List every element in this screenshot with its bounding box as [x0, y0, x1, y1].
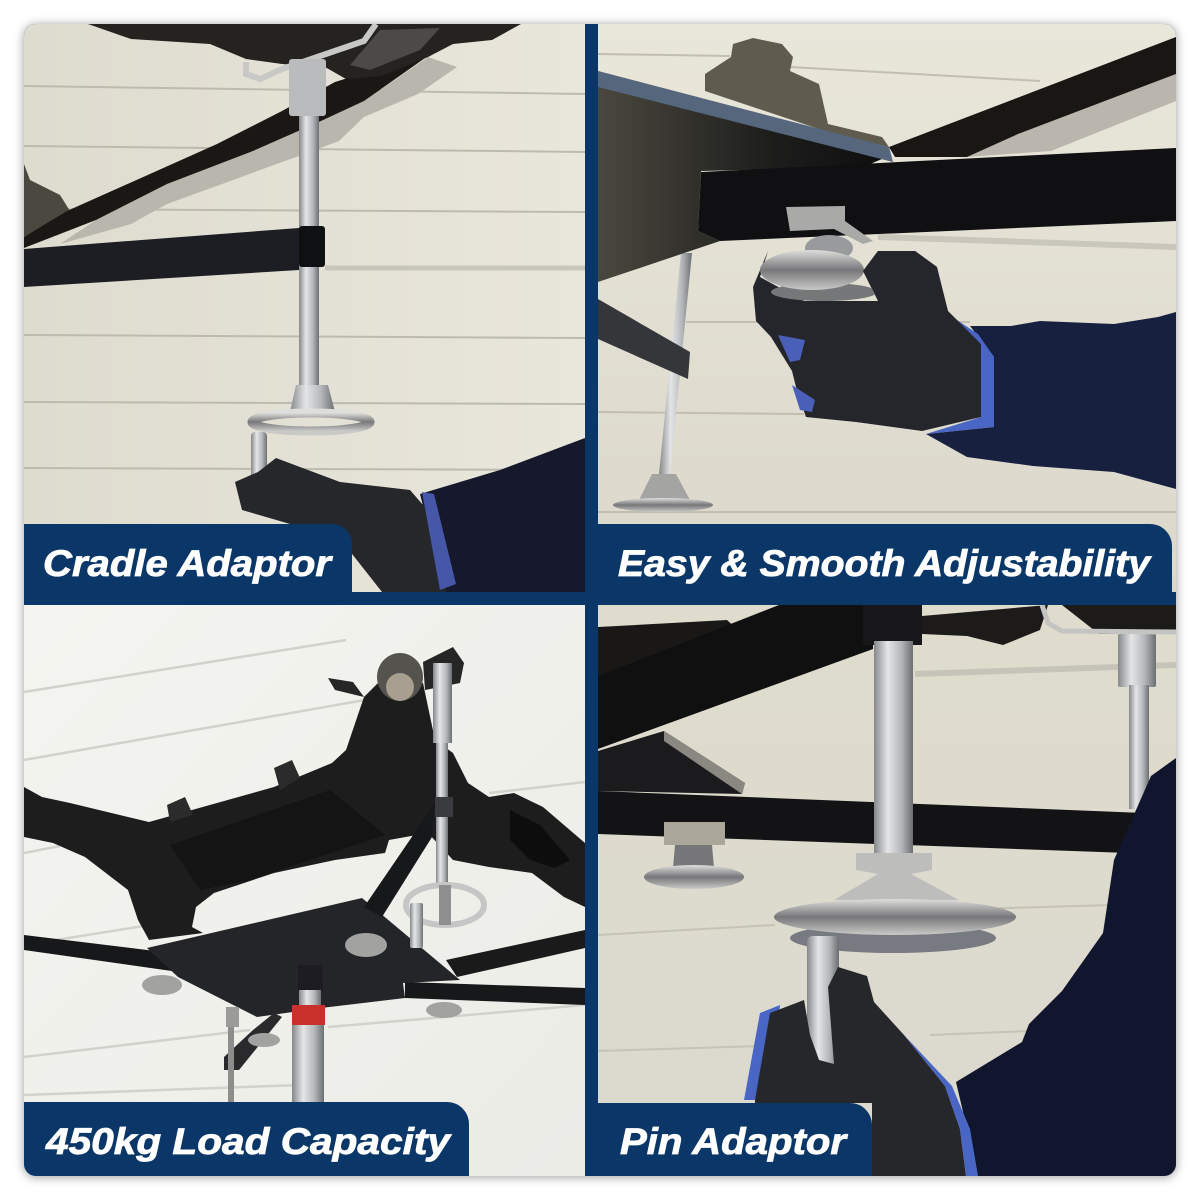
bushing [377, 653, 423, 701]
label: 450kg load capacity [24, 1102, 469, 1176]
arm sleeve [299, 226, 325, 267]
horizontal arm [24, 228, 299, 287]
wheel left [142, 975, 182, 995]
panel stamping [170, 790, 385, 890]
right rod [1129, 685, 1149, 809]
lower wheel [613, 498, 713, 512]
horizontal beam [598, 791, 1144, 853]
collar [289, 59, 326, 116]
wheel upright [406, 885, 484, 925]
label: 450kg load capacity: 450kg Load Capacity [45, 1121, 453, 1162]
glove cuff [926, 314, 994, 434]
collar [863, 605, 922, 645]
wheel plate [790, 923, 996, 953]
wheel hub [805, 235, 853, 256]
thumb [863, 251, 937, 294]
wheel lower [248, 1033, 280, 1047]
sleeve [956, 758, 1176, 1176]
hand wheel [252, 413, 370, 431]
threaded rod [299, 112, 319, 390]
glove [753, 251, 981, 431]
rear rod [228, 1027, 234, 1107]
bracket top [423, 647, 464, 690]
lower hub [639, 474, 690, 500]
vertical rod lower [436, 743, 448, 883]
wheel hub [834, 853, 959, 900]
label: pin adaptor: Pin Adaptor [620, 1121, 849, 1162]
wheel centre [345, 933, 387, 957]
label: cradle adaptor: Cradle Adaptor [43, 543, 334, 584]
navy divider horizontal [24, 592, 1176, 605]
small clip [664, 822, 725, 845]
wheel right [426, 1002, 462, 1018]
vertical rod upper [433, 663, 452, 743]
engine mount [705, 38, 889, 147]
panel: pin adaptor photo [598, 605, 1176, 1176]
central plate [147, 898, 460, 1017]
diagonal beam [598, 605, 873, 749]
plate underside [598, 71, 889, 282]
panel: cradle adaptor photo [24, 24, 585, 592]
ram top [298, 965, 323, 991]
label: easy and smooth adjustability [585, 524, 1172, 605]
glove cuff left [744, 1005, 780, 1100]
pin [807, 936, 839, 1064]
small hub [673, 845, 714, 868]
chassis top [88, 24, 521, 79]
glove cuff right [904, 1035, 978, 1176]
chassis left mount [24, 164, 70, 237]
chassis highlight [350, 28, 440, 70]
rail right [446, 930, 585, 977]
bushing centre [386, 673, 414, 701]
brace [364, 803, 435, 917]
small wheel [644, 865, 744, 889]
navy divider vertical [585, 24, 598, 1176]
panel: adjustability photo [598, 24, 1176, 592]
upper rail underside [967, 74, 1176, 157]
subframe bracket left [328, 678, 364, 697]
rear collar [226, 1007, 239, 1027]
rod sleeve [435, 797, 453, 817]
upright pin [410, 903, 423, 948]
lower bracket [224, 1013, 282, 1070]
glove [235, 458, 446, 592]
back frame [598, 620, 760, 680]
ram [292, 1025, 324, 1105]
tab [167, 760, 300, 822]
threaded rod [659, 253, 692, 474]
upper rail [889, 37, 1176, 157]
ram neck [299, 990, 321, 1007]
right collar [1118, 634, 1156, 687]
glove cuff [422, 492, 456, 590]
arm left [24, 935, 235, 980]
subframe [24, 683, 585, 940]
spoke [439, 885, 451, 925]
label: easy and smooth adjustability: Easy & Smooth Adjustability [618, 543, 1153, 584]
plate edge [664, 731, 745, 794]
panel: load capacity photo [24, 605, 585, 1176]
black beam [698, 148, 1176, 241]
clip [786, 206, 873, 244]
top frame [922, 605, 1176, 645]
glove [755, 967, 966, 1176]
sleeve [420, 438, 585, 592]
wheel hub [290, 385, 334, 410]
cradle hook [1042, 605, 1176, 632]
glove blue patch [778, 335, 815, 412]
threaded rod [874, 641, 913, 853]
rail underside [60, 57, 457, 244]
rail dark side [24, 51, 435, 248]
lower arm [598, 299, 690, 379]
pin [251, 432, 267, 475]
subframe hole [510, 810, 570, 868]
label: pin adaptor [585, 1103, 872, 1176]
wheel plate [771, 283, 877, 301]
wheel ring [760, 250, 864, 290]
red collar [292, 1005, 325, 1025]
cradle hook [246, 24, 376, 79]
sleeve [926, 312, 1176, 489]
arm lower right [405, 982, 585, 1005]
plate edge [598, 71, 893, 162]
plate [598, 731, 745, 794]
label: cradle adaptor [24, 524, 352, 592]
hand wheel [774, 899, 1016, 935]
